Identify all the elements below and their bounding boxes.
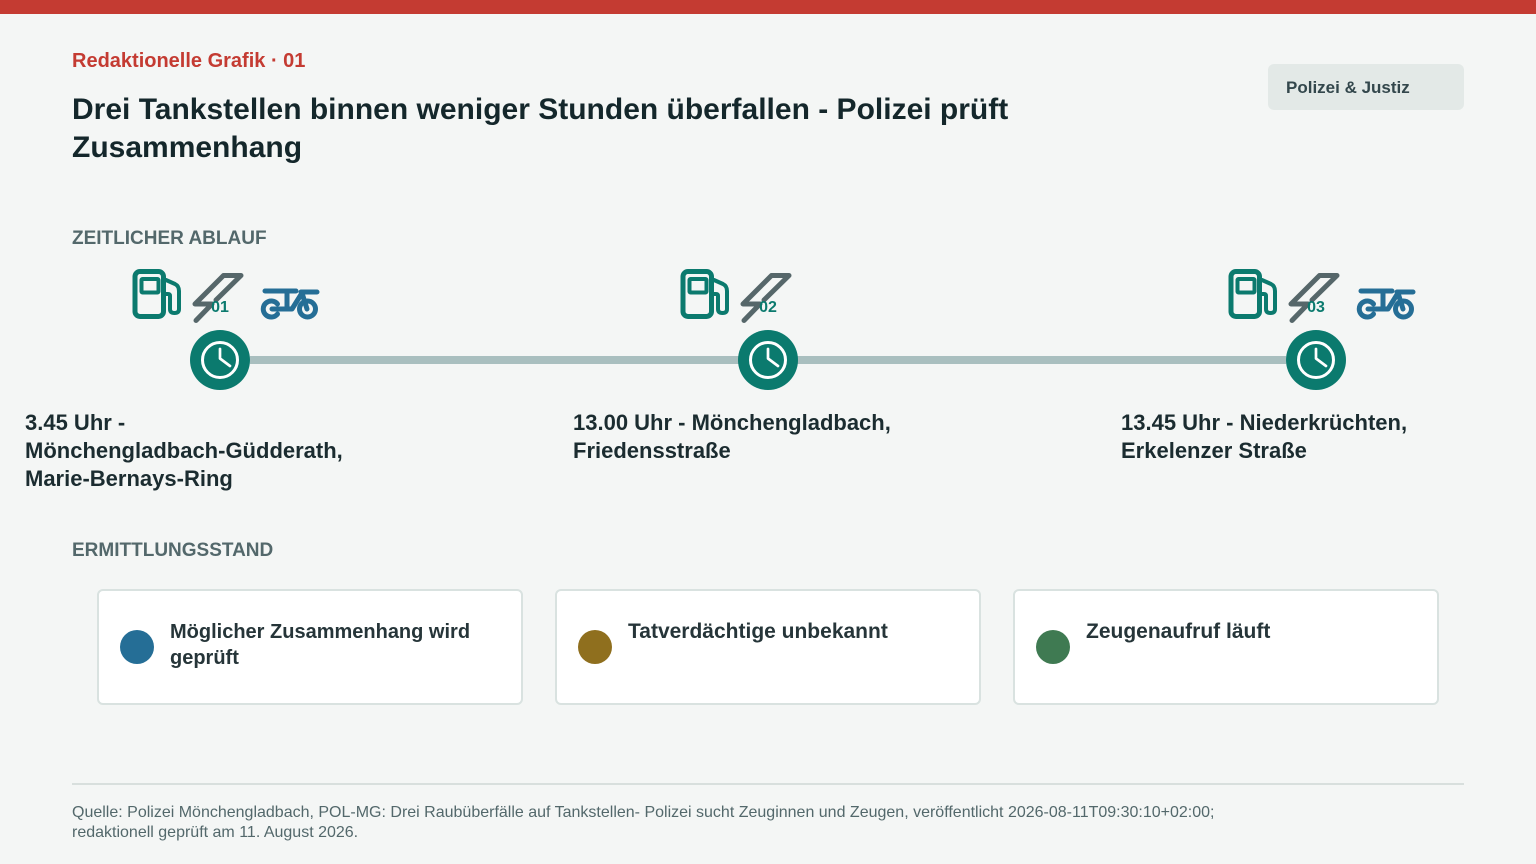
timeline line <box>250 356 1286 364</box>
icon: motorcycle <box>263 291 317 317</box>
status text 2: Tatverdächtige unbekannt <box>628 620 888 643</box>
status text 1: geprüft <box>170 647 239 669</box>
icon: lightning <box>195 276 241 320</box>
category tag <box>1268 64 1464 110</box>
category tag: Polizei & Justiz <box>1286 78 1410 97</box>
stop label 01: Mönchengladbach-Güdderath, <box>25 438 343 463</box>
timeline graphic <box>132 269 1416 390</box>
status dot green <box>1036 630 1070 664</box>
section heading: investigation status: ERMITTLUNGSSTAND <box>72 540 273 561</box>
status dot blue <box>120 630 154 664</box>
icon: fuel pump <box>683 272 727 316</box>
stop label 02: Friedensstraße <box>573 438 731 463</box>
source note: redaktionell geprüft am 11. August 2026. <box>72 824 358 841</box>
stop label 01: Marie-Bernays-Ring <box>25 466 233 491</box>
status text 1 <box>170 621 470 669</box>
icon: lightning <box>743 276 789 320</box>
eyebrow: Redaktionelle Grafik · 01 <box>72 50 305 72</box>
step number 02: 02 <box>759 299 777 316</box>
status dot ochre <box>578 630 612 664</box>
stop 02 markers <box>683 272 798 390</box>
step number 03: 03 <box>1307 299 1325 316</box>
source note: Quelle: Polizei Mönchengladbach, POL-MG: Drei Raubüberfälle auf Tankstellen- Polizei sucht Zeuginnen und Zeugen, veröffentlicht 2026-08-11T09:30:10+02:00; <box>72 804 1214 821</box>
clock marker <box>190 330 250 390</box>
stop label 02: 13.00 Uhr - Mönchengladbach, <box>573 410 891 435</box>
status text 3: Zeugenaufruf läuft <box>1086 620 1270 643</box>
status card 1 <box>97 589 523 705</box>
stop label 01 <box>25 410 343 491</box>
icon: motorcycle <box>1359 291 1413 317</box>
clock marker <box>738 330 798 390</box>
icon: fuel pump <box>135 272 179 316</box>
source note <box>72 804 1214 841</box>
title: Drei Tankstellen binnen weniger Stunden überfallen - Polizei prüft Zusammenhang <box>72 93 1008 164</box>
icon: lightning <box>1291 276 1337 320</box>
stop 01 markers <box>135 272 317 390</box>
icon: fuel pump <box>1231 272 1275 316</box>
clock marker <box>1286 330 1346 390</box>
stop label 02 <box>573 410 891 463</box>
stop label 03: Erkelenzer Straße <box>1121 438 1307 463</box>
stop 03 markers <box>1231 272 1413 390</box>
status card 3 <box>1013 589 1439 705</box>
stop label 03: 13.45 Uhr - Niederkrüchten, <box>1121 410 1407 435</box>
status text 1: Möglicher Zusammenhang wird <box>170 621 470 643</box>
status card 2 <box>555 589 981 705</box>
stop label 03 <box>1121 410 1407 463</box>
step number 01: 01 <box>211 299 229 316</box>
section heading: timeline: ZEITLICHER ABLAUF <box>72 228 267 249</box>
top bar <box>0 0 1536 14</box>
stop label 01: 3.45 Uhr - <box>25 410 125 435</box>
